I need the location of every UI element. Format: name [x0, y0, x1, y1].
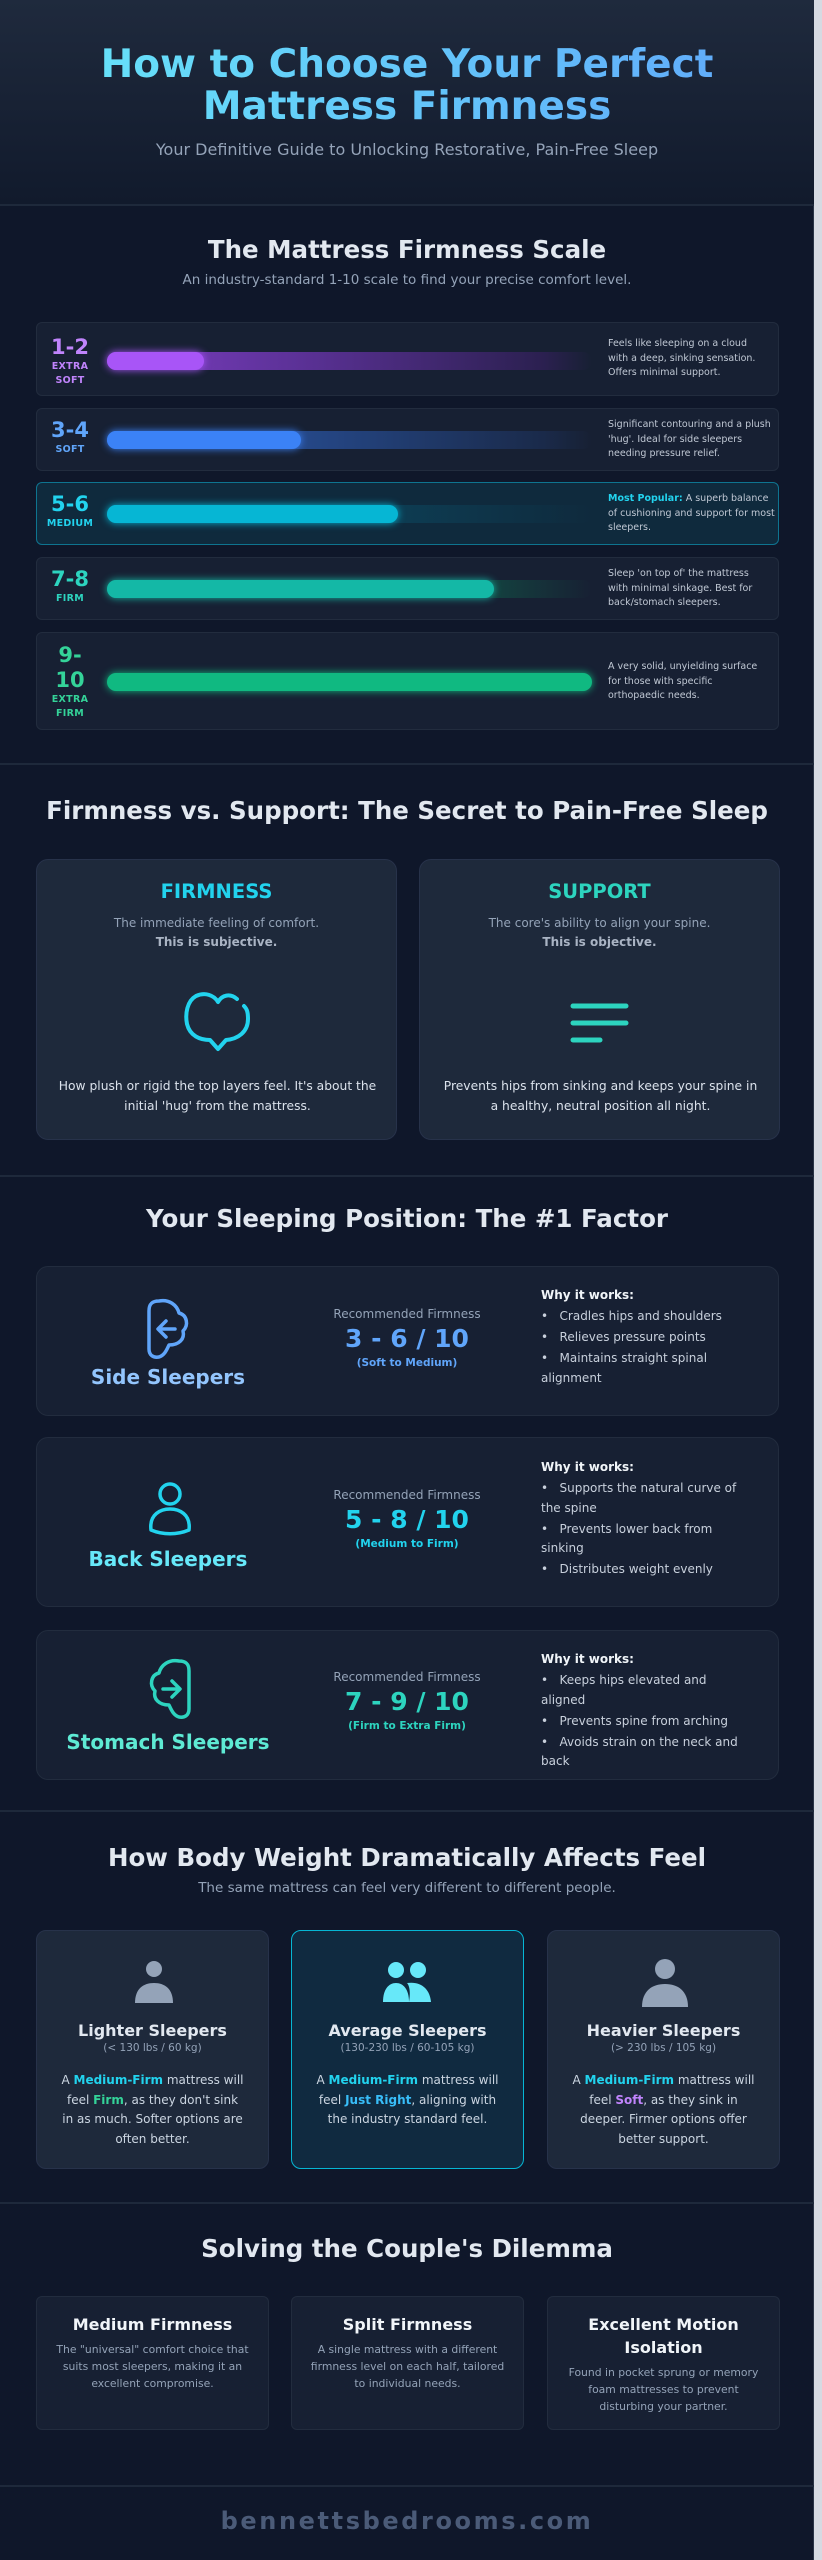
icon: stomach sleeper	[150, 1658, 191, 1719]
panel: heavier sleepers	[547, 1930, 780, 2169]
icon: heart	[184, 992, 250, 1052]
panel: side sleepers: • Relieves pressure points	[541, 1330, 706, 1344]
section heading: couples: Solving the Couple's Dilemma	[201, 2234, 613, 2263]
panel: heavier sleepers: A Medium-Firm mattress will feel Soft, as they sink in deeper. Firmer options offer better support.	[572, 2073, 755, 2146]
panel: support: SUPPORT	[548, 880, 651, 903]
panel: support: This is objective.	[542, 935, 657, 949]
panel: stomach sleepers: • Prevents spine from arching	[541, 1714, 728, 1728]
icon: support lines	[570, 1004, 628, 1042]
panel: heavier sleepers: (> 230 lbs / 105 kg)	[611, 2042, 716, 2054]
scale row 9-10: 9-	[58, 643, 82, 667]
icon: back sleeper	[149, 1482, 191, 1536]
panel: back sleepers: 5 - 8 / 10	[345, 1505, 469, 1534]
scale row 1-2: Feels like sleeping on a cloud with a deep, sinking sensation. Offers minimal support.	[608, 338, 755, 378]
scale row 7-8: Sleep 'on top of' the mattress with minimal sinkage. Best for back/stomach sleepers.	[608, 568, 752, 608]
panel: back sleepers: Recommended Firmness	[333, 1488, 481, 1502]
icon: two people	[383, 1962, 431, 2002]
scale row 9-10: 10	[55, 668, 85, 692]
panel: average sleepers: (130-230 lbs / 60-105 kg)	[341, 2042, 474, 2054]
section heading: firmness scale: The Mattress Firmness Scale	[208, 235, 606, 264]
panel: medium firmness: Medium Firmness	[73, 2315, 232, 2334]
title	[0, 44, 814, 128]
panel: lighter sleepers: (< 130 lbs / 60 kg)	[103, 2042, 202, 2054]
scale row 7-8: 7-8	[51, 567, 89, 591]
panel: back sleepers: • Distributes weight evenly	[541, 1562, 713, 1576]
panel: firmness: This is subjective.	[156, 935, 277, 949]
panel: support: The core's ability to align your spine.	[489, 916, 710, 930]
panel: back sleepers: • Supports the natural curve of the spine	[541, 1481, 736, 1514]
scale row 9-10: A very solid, unyielding surface for those with specific orthopaedic needs.	[608, 661, 757, 701]
panel: lighter sleepers: in as much. Softer options are often better.	[62, 2112, 243, 2146]
scale row 3-4: SOFT	[55, 444, 85, 455]
header	[0, 0, 814, 205]
panel: back sleepers: Back Sleepers	[89, 1547, 247, 1571]
panel: split firmness	[291, 2296, 524, 2430]
panel: support	[419, 859, 780, 1140]
title: Mattress Firmness	[203, 84, 611, 129]
footer: bennettsbedrooms.com	[221, 2507, 593, 2535]
panel: back sleepers: (Medium to Firm)	[355, 1538, 459, 1550]
section heading: firmness vs support: Firmness vs. Support: The Secret to Pain-Free Sleep	[46, 796, 768, 825]
panel: firmness: FIRMNESS	[161, 880, 272, 903]
panel: stomach sleepers: Stomach Sleepers	[66, 1730, 270, 1754]
panel: back sleepers: Why it works:	[541, 1460, 634, 1474]
scale row 5-6 (highlighted)	[36, 482, 779, 545]
panel: firmness	[36, 859, 397, 1140]
panel: split firmness: Split Firmness	[343, 2315, 472, 2334]
scale row 1-2: 1-2	[51, 335, 89, 359]
panel: support: a healthy, neutral position all night.	[491, 1099, 710, 1113]
scale row 3-4	[36, 408, 779, 471]
panel: stomach sleepers	[36, 1630, 779, 1780]
panel: split firmness: A single mattress with a different firmness level on each half, tailored to individual needs.	[311, 2343, 504, 2390]
panel: side sleepers: Side Sleepers	[91, 1365, 245, 1389]
scale row 9-10: EXTRA	[52, 694, 88, 705]
panel: firmness: How plush or rigid the top layers feel. It's about the initial 'hug' from the mattress.	[59, 1079, 376, 1113]
scale row 1-2: SOFT	[55, 375, 85, 386]
panel: support: Prevents hips from sinking and keeps your spine in	[444, 1079, 757, 1093]
scale row 1-2	[36, 322, 779, 396]
section heading: sleeping position: Your Sleeping Position: The #1 Factor	[146, 1204, 668, 1233]
scale row 7-8	[36, 557, 779, 620]
panel: heavier sleepers: Heavier Sleepers	[587, 2021, 740, 2040]
panel: average sleepers: Average Sleepers	[328, 2021, 487, 2040]
icon: person large	[642, 1959, 688, 2007]
panel: stomach sleepers: Why it works:	[541, 1652, 634, 1666]
panel: medium firmness	[36, 2296, 269, 2430]
panel: lighter sleepers: Lighter Sleepers	[78, 2021, 227, 2040]
scale row 1-2: EXTRA	[52, 361, 88, 372]
scale row 7-8: FIRM	[56, 593, 84, 604]
panel: side sleepers: Why it works:	[541, 1288, 634, 1302]
panel: stomach sleepers: Recommended Firmness	[333, 1670, 481, 1684]
panel: side sleepers	[36, 1266, 779, 1416]
section subtitle: The same mattress can feel very different to different people.	[198, 1880, 616, 1896]
icon: side sleeper	[147, 1298, 188, 1359]
panel: motion isolation: Found in pocket sprung or memory foam mattresses to prevent disturbing your partner.	[569, 2366, 758, 2413]
subtitle: Your Definitive Guide to Unlocking Restorative, Pain-Free Sleep	[156, 140, 658, 159]
panel: average sleepers: A Medium-Firm mattress will feel Just Right, aligning with the industry standard feel.	[316, 2073, 499, 2126]
panel: average sleepers	[291, 1930, 524, 2169]
panel: side sleepers: • Cradles hips and shoulders	[541, 1309, 722, 1323]
panel: side sleepers: 3 - 6 / 10	[345, 1324, 469, 1353]
panel: side sleepers: • Maintains straight spinal alignment	[541, 1351, 707, 1384]
panel: motion isolation	[547, 2296, 780, 2430]
scale row 3-4: Significant contouring and a plush 'hug'. Ideal for side sleepers needing pressure relief.	[608, 419, 771, 459]
section heading: body weight: How Body Weight Dramatically Affects Feel	[108, 1843, 706, 1872]
panel: stomach sleepers: (Firm to Extra Firm)	[348, 1720, 466, 1732]
scale row 5-6 (highlighted): MEDIUM	[47, 518, 93, 529]
icon: person small	[135, 1961, 173, 2003]
scale row 9-10	[36, 632, 779, 730]
scale row 5-6 (highlighted): Most Popular: A superb balance of cushioning and support for most sleepers.	[608, 493, 775, 533]
panel: stomach sleepers: • Avoids strain on the neck and back	[541, 1734, 738, 1768]
scale row 5-6 (highlighted): 5-6	[51, 492, 89, 516]
scale row 9-10: FIRM	[56, 708, 84, 719]
panel: stomach sleepers: 7 - 9 / 10	[345, 1687, 469, 1716]
panel: stomach sleepers: • Keeps hips elevated and aligned	[541, 1673, 707, 1706]
panel: motion isolation: Excellent Motion Isolation	[588, 2315, 739, 2357]
title: How to Choose Your Perfect	[101, 42, 713, 87]
panel: side sleepers: (Soft to Medium)	[357, 1357, 457, 1369]
panel: back sleepers	[36, 1437, 779, 1607]
panel: lighter sleepers: A Medium-Firm mattress will feel Firm, as they don't sink	[61, 2073, 244, 2106]
scale row 3-4: 3-4	[51, 418, 89, 442]
panel: lighter sleepers	[36, 1930, 269, 2169]
panel: back sleepers: • Prevents lower back from sinking	[541, 1522, 712, 1555]
panel: medium firmness: The "universal" comfort choice that suits most sleepers, making it an excellent compromise.	[56, 2343, 249, 2390]
panel: side sleepers: Recommended Firmness	[333, 1307, 481, 1321]
section subtitle: An industry-standard 1-10 scale to find your precise comfort level.	[183, 272, 631, 288]
panel: firmness: The immediate feeling of comfort.	[114, 916, 319, 930]
